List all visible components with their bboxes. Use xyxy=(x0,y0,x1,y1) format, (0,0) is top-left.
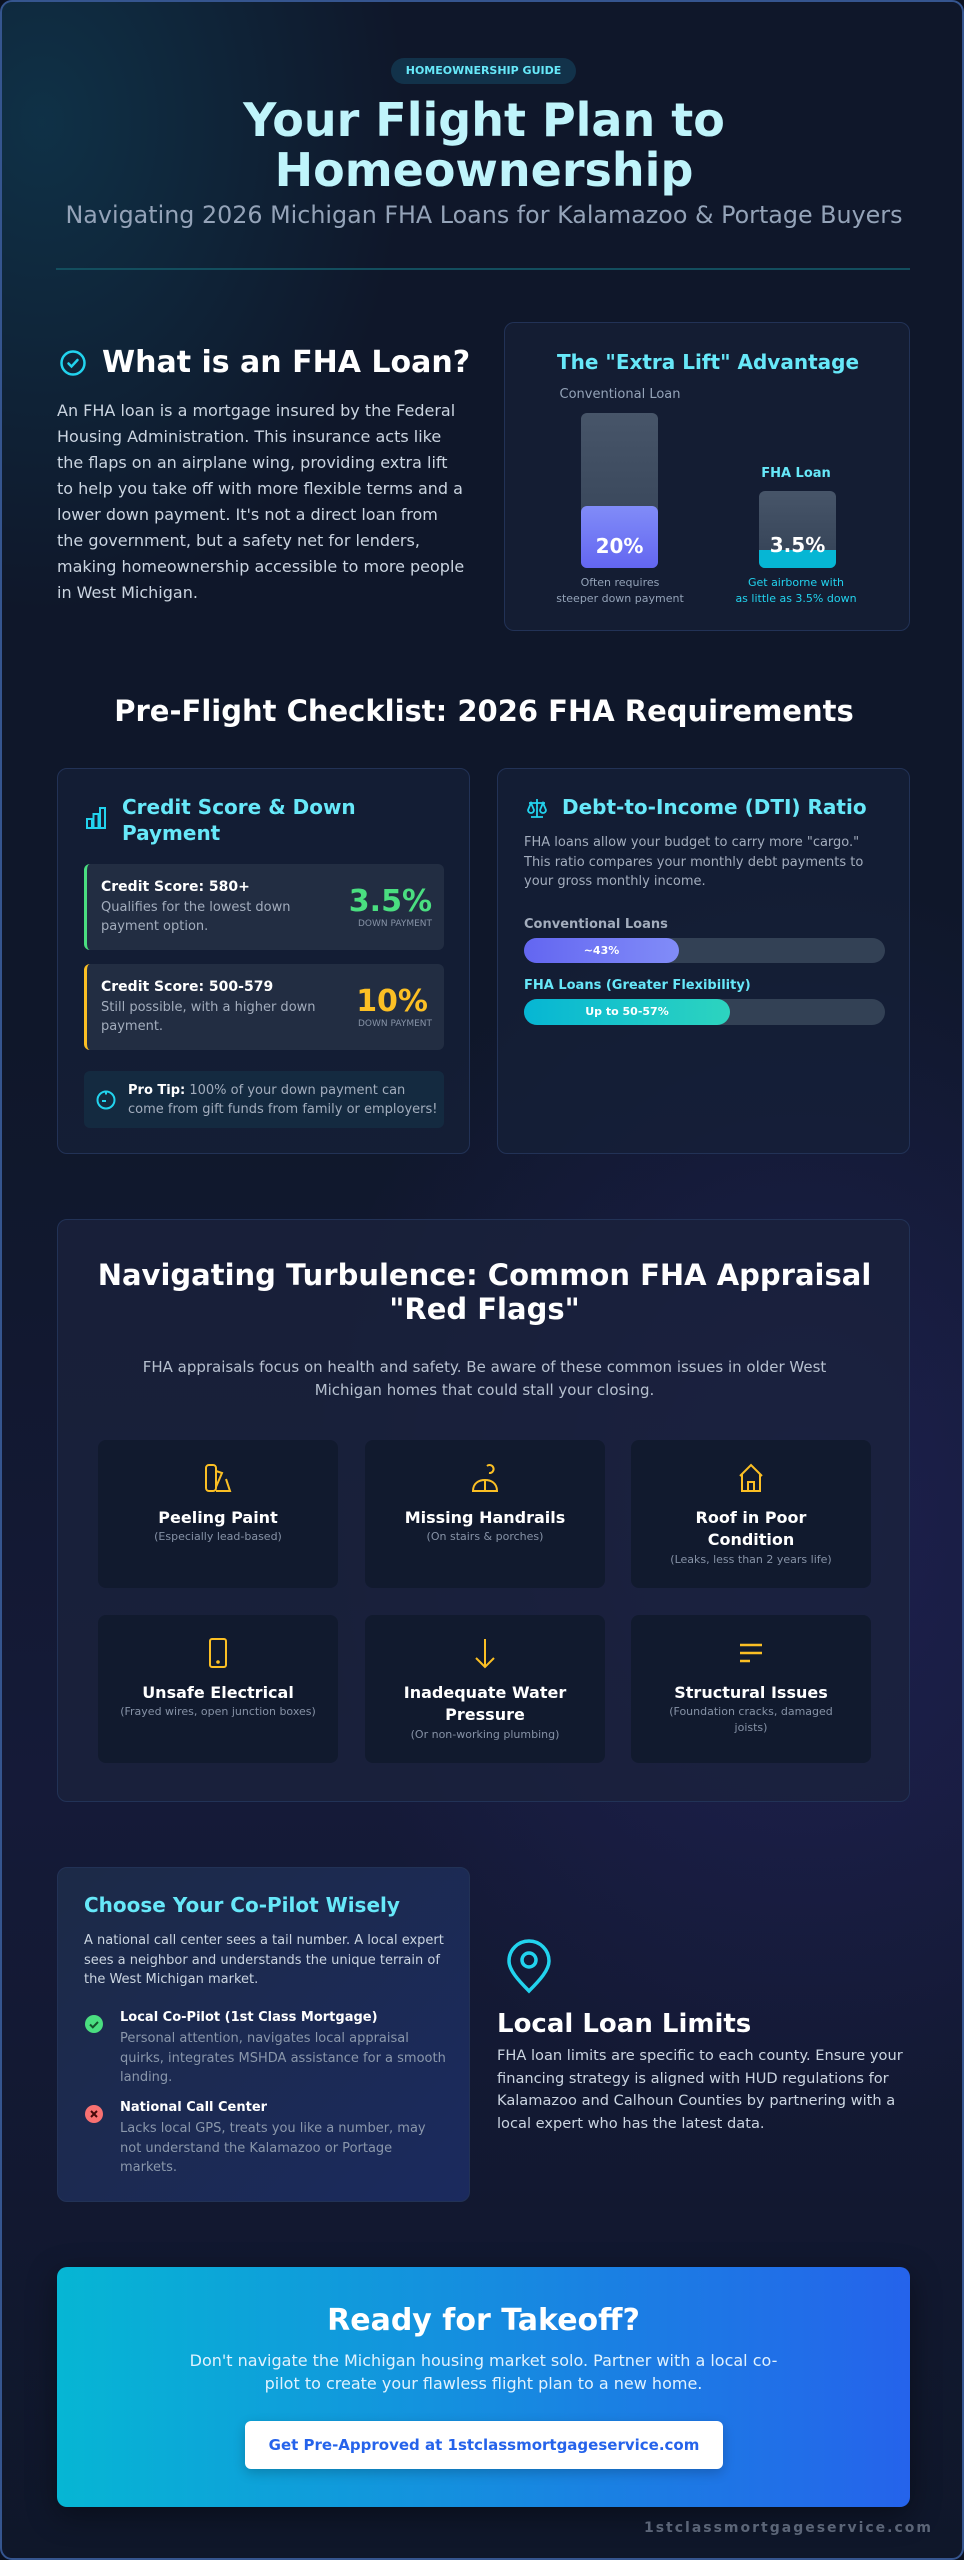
panel: extra lift chart xyxy=(504,322,910,631)
item: national call center: National Call Center xyxy=(120,2100,267,2115)
bar: FHA: FHA Loan xyxy=(761,466,831,481)
item: 500-579: 10% xyxy=(356,984,428,1019)
icon: map pin xyxy=(507,1939,551,1994)
cell: peeling paint xyxy=(98,1440,338,1588)
panel: credit score xyxy=(57,768,470,1154)
title: Your Flight Plan to xyxy=(243,93,725,147)
cell: electrical xyxy=(98,1615,338,1763)
title: Homeownership xyxy=(275,143,693,197)
bar: FHA xyxy=(524,978,885,1025)
item: local co-pilot xyxy=(85,2010,446,2085)
text: local loan limits: FHA loan limits are specific to each county. Ensure your financing strategy is aligned with HUD regulations for Kalamazoo and Calhoun Counties by partnering with a local expert who has the latest data. xyxy=(497,2047,903,2132)
item: 500-579: Still possible, with a higher down payment. xyxy=(101,1000,316,1034)
heading: Choose Your Co-Pilot Wisely xyxy=(84,1893,400,1917)
cell: water pressure: Inadequate Water xyxy=(404,1683,566,1702)
cell: handrails: Missing Handrails xyxy=(405,1508,565,1527)
text: FHA definition: An FHA loan is a mortgage insured by the Federal Housing Administration. This insurance acts like the flaps on an airplane wing, providing extra lift to help you take off with more flexible terms and a lower down payment. It's not a direct loan from the government, but a safety net for lenders, making homeownership accessible to more people in West Michigan. xyxy=(57,401,464,602)
item: 580+: DOWN PAYMENT xyxy=(358,919,432,929)
item: 580+: 3.5% xyxy=(349,884,432,919)
icon: bar chart xyxy=(86,807,106,829)
CTA heading: Ready for Takeoff? xyxy=(327,2303,640,2338)
badge: HOMEOWNERSHIP GUIDE xyxy=(406,64,561,77)
cell: electrical: Unsafe Electrical xyxy=(142,1683,294,1702)
item: 500-579 xyxy=(84,964,444,1050)
bar: FHA: Up to 50-57% xyxy=(585,1005,669,1018)
heading: Debt-to-Income (DTI) Ratio xyxy=(562,795,867,819)
bar: FHA xyxy=(735,466,857,605)
intro text: FHA appraisals focus on health and safety. Be aware of these common issues in older West xyxy=(143,1358,826,1376)
cell: water pressure xyxy=(365,1615,605,1763)
item: local co-pilot: Personal attention, navigates local appraisal quirks, integrates MSHDA assistance for a smooth landing. xyxy=(120,2031,446,2085)
bar: conventional: 20% xyxy=(596,534,643,558)
heading: "Red Flags" xyxy=(389,1292,580,1326)
heading xyxy=(98,1258,871,1326)
item: 500-579: DOWN PAYMENT xyxy=(358,1019,432,1029)
bar: FHA: FHA Loans (Greater Flexibility) xyxy=(524,978,751,993)
callout: pro tip: Pro Tip: 100% of your down payment can come from gift funds from family or employers! xyxy=(128,1083,438,1117)
intro text: Michigan homes that could stall your closing. xyxy=(315,1381,654,1399)
panel: red flags xyxy=(57,1219,910,1802)
bar: conventional: steeper down payment xyxy=(556,592,684,605)
badge xyxy=(391,58,576,84)
cell: structural: (Foundation cracks, damaged joists) xyxy=(669,1705,833,1734)
item: local co-pilot: Local Co-Pilot (1st Class Mortgage) xyxy=(120,2010,378,2025)
bar: FHA: 3.5% xyxy=(770,533,825,557)
heading: what is an FHA loan: What is an FHA Loan? xyxy=(102,345,470,380)
cell: electrical: (Frayed wires, open junction boxes) xyxy=(120,1705,316,1718)
item: national call center xyxy=(85,2100,426,2175)
panel: DTI xyxy=(497,768,910,1154)
footer url: 1stclassmortgageservice.com xyxy=(644,2520,933,2536)
heading: Credit Score & Down Payment xyxy=(122,795,356,845)
CTA text: Don't navigate the Michigan housing market solo. Partner with a local co-pilot to create your flawless flight plan to a new home. xyxy=(190,2351,777,2393)
bar: conventional xyxy=(524,917,885,963)
cell: peeling paint: Peeling Paint xyxy=(158,1508,278,1527)
item: 580+ xyxy=(84,864,444,950)
item: 580+: Credit Score: 580+ xyxy=(101,879,250,895)
cell: structural xyxy=(631,1615,871,1763)
icon: check circle xyxy=(60,350,86,376)
heading: pre-flight checklist: Pre-Flight Checklist: 2026 FHA Requirements xyxy=(114,694,854,728)
bar: conventional xyxy=(556,387,684,605)
cell: water pressure: Pressure xyxy=(445,1705,525,1724)
button: Get Pre-Approved at 1stclassmortgageservice.com xyxy=(269,2436,699,2454)
cell: roof xyxy=(631,1440,871,1588)
item: 580+: Qualifies for the lowest down payment option. xyxy=(101,900,291,934)
icon: scale xyxy=(527,799,547,818)
chart title: The "Extra Lift" Advantage xyxy=(557,350,859,374)
bar: FHA: Get airborne with xyxy=(748,576,844,589)
bar: conventional: Often requires xyxy=(581,576,659,589)
text: A national call center sees a tail number. A local expert sees a neighbor and understands the unique terrain of the West Michigan market. xyxy=(84,1933,444,1987)
text: FHA loans allow your budget to carry more "cargo." This ratio compares your monthly debt payments to your gross monthly income. xyxy=(524,835,863,889)
bar: conventional: Conventional Loans xyxy=(524,917,668,932)
cell: handrails: (On stairs & porches) xyxy=(427,1530,543,1543)
button xyxy=(245,2421,723,2469)
cell: roof: Condition xyxy=(708,1530,794,1549)
intro text xyxy=(143,1358,826,1399)
bar: FHA: as little as 3.5% down xyxy=(735,592,857,605)
panel: co-pilot xyxy=(57,1867,470,2202)
heading: local loan limits: Local Loan Limits xyxy=(497,2009,751,2039)
title xyxy=(242,93,725,197)
cell: peeling paint: (Especially lead-based) xyxy=(154,1530,282,1543)
cell: roof: Roof in Poor xyxy=(696,1508,806,1527)
bar: conventional: ~43% xyxy=(584,944,619,957)
cell: water pressure: (Or non-working plumbing) xyxy=(411,1728,559,1741)
cell: structural: Structural Issues xyxy=(674,1683,828,1702)
callout: pro tip xyxy=(84,1071,444,1128)
item: national call center: Lacks local GPS, treats you like a number, may not understand the Kalamazoo or Portage markets. xyxy=(120,2121,426,2175)
cell: roof: (Leaks, less than 2 years life) xyxy=(670,1553,832,1566)
heading: Navigating Turbulence: Common FHA Appraisal xyxy=(98,1258,871,1292)
bar: conventional: Conventional Loan xyxy=(560,387,680,402)
item: 500-579: Credit Score: 500-579 xyxy=(101,979,273,995)
subtitle: Navigating 2026 Michigan FHA Loans for Kalamazoo & Portage Buyers xyxy=(66,201,902,229)
panel: CTA xyxy=(57,2267,910,2507)
cell: handrails xyxy=(365,1440,605,1588)
